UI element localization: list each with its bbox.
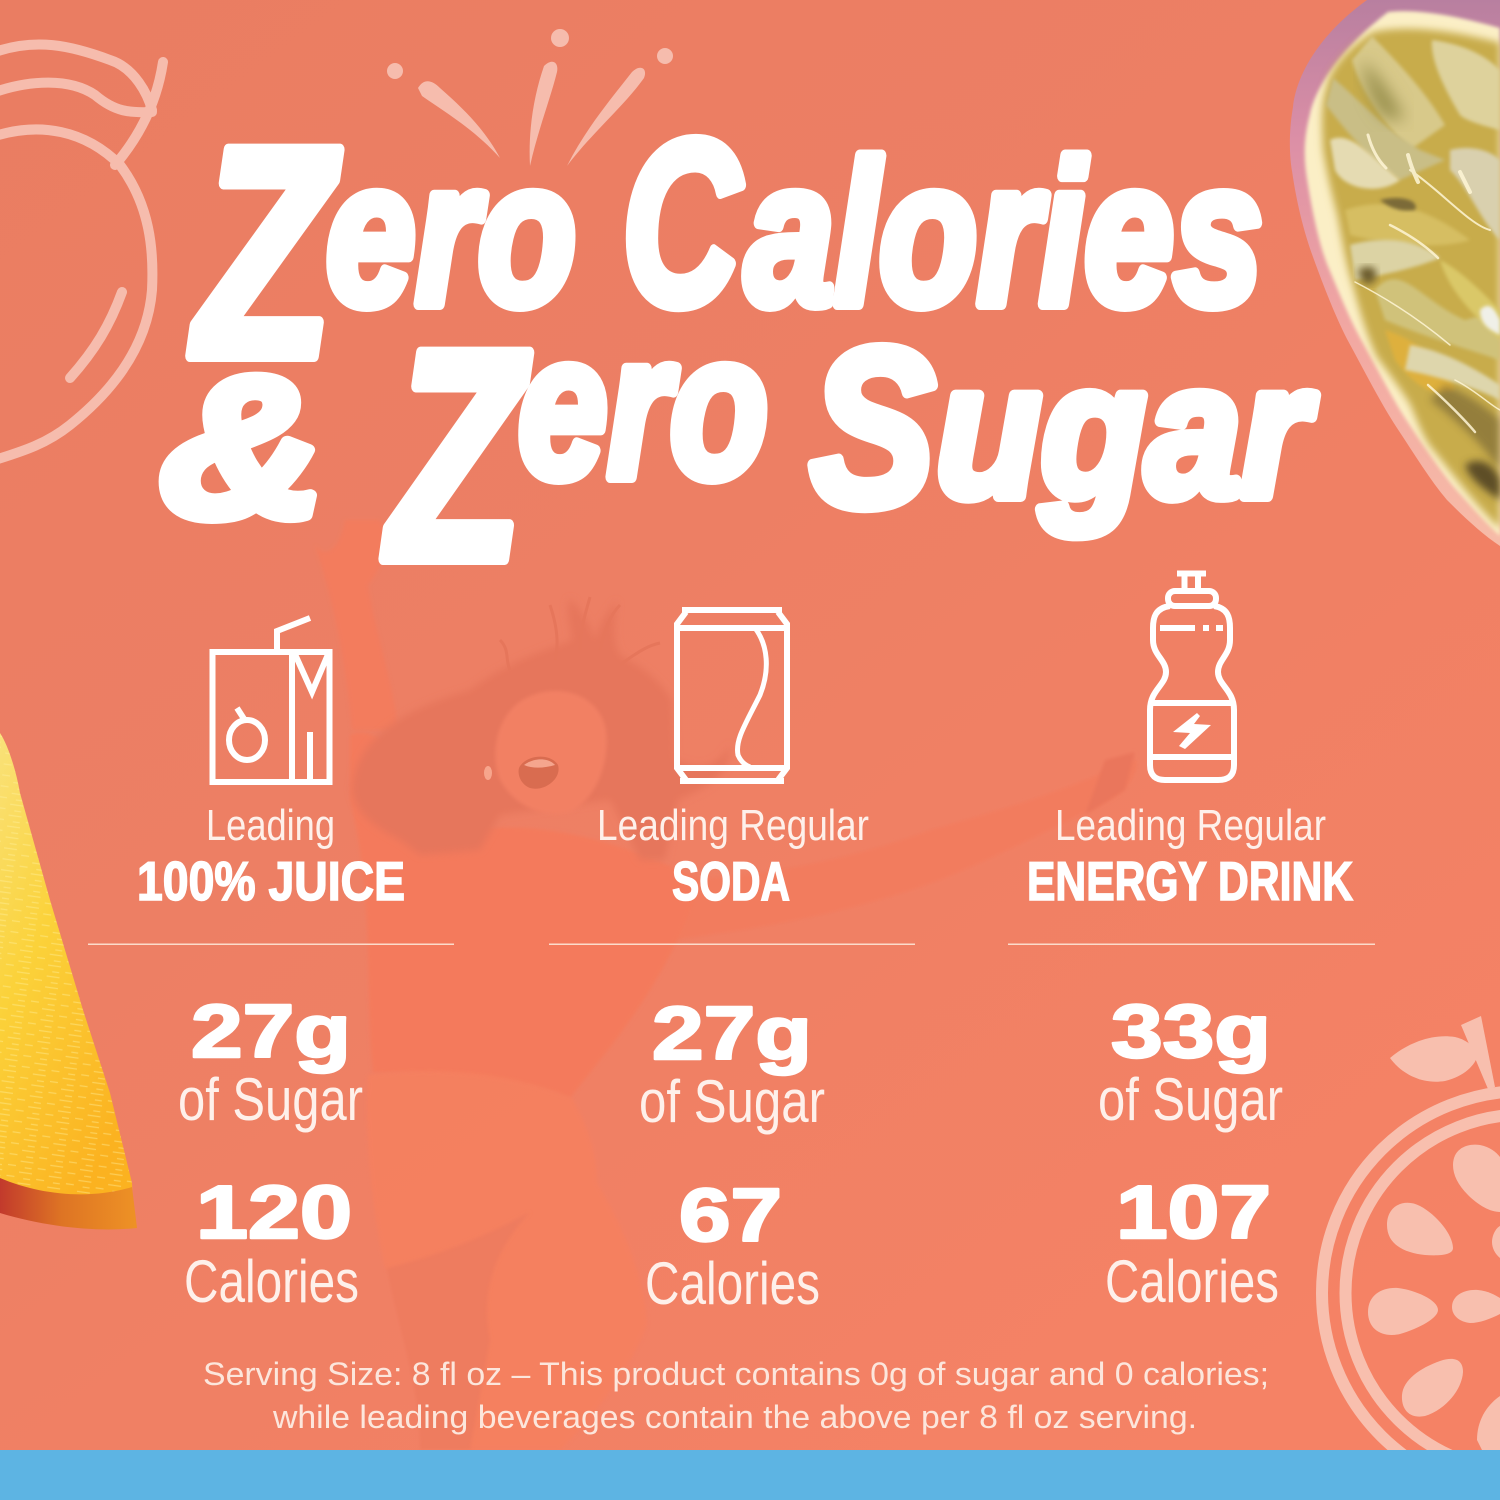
column: 100% juice xyxy=(88,801,454,1315)
stat: 120 calories: Calories xyxy=(184,1248,359,1315)
label: 100% juice: 100% JUICE xyxy=(137,850,405,912)
title line 1: Zero Calories: ero xyxy=(326,119,576,348)
footnote: Serving Size: 8 fl oz – This product contains 0g of sugar and 0 calories; xyxy=(203,1356,1269,1392)
footnote: while leading beverages contain the above per 8 fl oz serving. xyxy=(272,1399,1197,1435)
title line 2: & Zero Sugar: S xyxy=(810,301,935,553)
stat: 33g of sugar: of Sugar xyxy=(1098,1066,1283,1133)
label: leading: Leading xyxy=(206,801,335,850)
decoration: burst above title xyxy=(387,29,673,166)
fruit: passion fruit half xyxy=(1280,0,1500,560)
title xyxy=(160,84,1316,623)
stat: 27g of sugar xyxy=(639,991,825,1135)
column: energy drink xyxy=(1008,801,1375,1315)
decoration: peach outline xyxy=(0,44,163,460)
stat: 67 calories: 67 xyxy=(679,1173,782,1257)
label: energy drink: ENERGY DRINK xyxy=(1027,850,1353,912)
icon: juice box xyxy=(212,618,330,782)
bottom bar xyxy=(0,1450,1500,1500)
title line 2: & Zero Sugar: ugar xyxy=(936,325,1316,537)
stat: 120 calories: 120 xyxy=(196,1170,352,1254)
stat: 33g of sugar: 33g xyxy=(1111,989,1271,1073)
stat: 107 calories: 107 xyxy=(1116,1170,1271,1254)
stat: 27g of sugar: 27g xyxy=(191,989,351,1073)
stat: 27g of sugar: of Sugar xyxy=(639,1068,825,1135)
stat: 27g of sugar xyxy=(178,989,363,1133)
stat: 107 calories xyxy=(1105,1170,1279,1315)
title line 2: & Zero Sugar xyxy=(160,287,1316,623)
decoration: guava outline xyxy=(1322,1016,1500,1495)
stat: 107 calories: Calories xyxy=(1105,1248,1279,1315)
label: leading regular: Leading Regular xyxy=(1055,801,1326,850)
icon: soda can xyxy=(677,610,787,781)
photo: jumping woman (faded) xyxy=(315,520,1137,1450)
stat: 27g of sugar: of Sugar xyxy=(178,1066,363,1133)
title line 1: Zero Calories xyxy=(188,84,1263,420)
title line 1: Zero Calories: Z xyxy=(188,84,343,420)
footnote xyxy=(203,1356,1269,1435)
title line 1: Zero Calories: C xyxy=(622,91,742,354)
stat: 120 calories xyxy=(184,1170,359,1315)
column: soda xyxy=(549,801,915,1317)
stat: 27g of sugar: 27g xyxy=(652,991,812,1075)
label: soda: SODA xyxy=(672,850,790,912)
title line 1: Zero Calories: alories xyxy=(745,119,1263,348)
icon: sports bottle xyxy=(1150,574,1234,780)
title line 2: & Zero Sugar: & xyxy=(160,336,325,559)
title line 2: & Zero Sugar: Z xyxy=(381,287,533,623)
stat: 33g of sugar xyxy=(1098,989,1283,1133)
stat: 67 calories xyxy=(645,1173,820,1317)
stat: 67 calories: Calories xyxy=(645,1250,820,1317)
fruit: mango slice xyxy=(0,733,137,1229)
label: leading regular: Leading Regular xyxy=(597,801,869,850)
title line 2: & Zero Sugar: ero xyxy=(518,292,768,521)
